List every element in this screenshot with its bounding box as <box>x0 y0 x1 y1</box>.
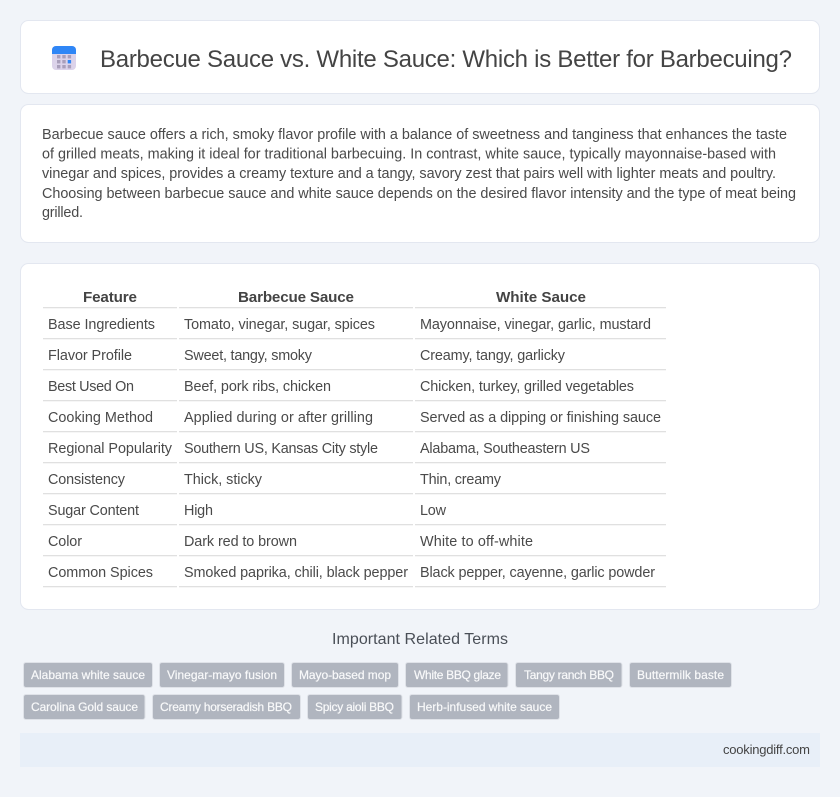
table row: consistency: Thick, sticky <box>184 472 263 488</box>
table row: consistency: Consistency <box>48 472 126 488</box>
footer source text: cookingdiff.com <box>723 742 810 757</box>
tag: Tangy ranch BBQ: Tangy ranch BBQ <box>524 668 614 682</box>
table header row: Barbecue Sauce <box>238 289 354 306</box>
table row: color <box>48 534 533 550</box>
table row: color: Dark red to brown <box>184 534 297 550</box>
tag: Herb-infused white sauce <box>410 694 560 720</box>
table row: regional popularity: Regional Popularity <box>48 441 173 457</box>
table row: regional popularity: Alabama, Southeastern US <box>420 441 590 457</box>
table row: regional popularity: Southern US, Kansas City style <box>184 441 378 457</box>
panel: introduction paragraph <box>20 104 820 242</box>
table row: cooking method <box>48 410 661 426</box>
table row: sugar content: Sugar Content <box>48 503 139 519</box>
tag: Carolina Gold sauce <box>24 694 145 720</box>
tag: White BBQ glaze <box>406 662 508 688</box>
tag: Herb-infused white sauce: Herb-infused white sauce <box>417 700 552 714</box>
tag: Buttermilk baste <box>630 662 732 688</box>
tags: related terms <box>24 662 732 720</box>
tag: Alabama white sauce <box>24 662 152 688</box>
table row: sugar content <box>48 503 447 519</box>
table header row: Feature <box>83 289 137 306</box>
tag: Spicy aioli BBQ: Spicy aioli BBQ <box>315 700 394 714</box>
table row: common spices <box>48 565 655 581</box>
text block: introduction: vinegar and spices, provides a creamy texture and a tangy, savory zest that pairs well with lighter meats and poultry. <box>42 166 776 182</box>
text block: introduction <box>42 127 796 221</box>
tag: Tangy ranch BBQ <box>516 662 622 688</box>
table row: base ingredients: Base Ingredients <box>48 317 155 333</box>
tag: Mayo-based mop <box>292 662 398 688</box>
table row: color: White to off-white <box>420 534 533 550</box>
table row: best used on: Best Used On <box>48 379 134 395</box>
text block: introduction: grilled. <box>42 205 83 221</box>
table row: common spices: Common Spices <box>48 565 153 581</box>
text block: introduction: of grilled meats, making it ideal for traditional barbecuing. In contrast, white sauce, typically mayonnaise-based with <box>42 146 776 162</box>
table header row: White Sauce <box>496 289 586 306</box>
table row: sugar content: High <box>184 503 213 519</box>
table row: cooking method: Applied during or after grilling <box>184 410 373 426</box>
tag: Alabama white sauce: Alabama white sauce <box>31 668 145 682</box>
text block: introduction: Choosing between barbecue sauce and white sauce depends on the desired flavor intensity and the type of meat being <box>42 186 796 202</box>
panel: title header <box>20 20 820 94</box>
table row: regional popularity <box>48 441 590 457</box>
table row: common spices: Smoked paprika, chili, black pepper <box>184 565 408 581</box>
panel: comparison table <box>20 264 820 610</box>
table row: best used on <box>48 379 634 395</box>
table row: base ingredients: Tomato, vinegar, sugar, spices <box>184 317 375 333</box>
tag: Creamy horseradish BBQ: Creamy horseradish BBQ <box>160 700 292 714</box>
table row: cooking method: Served as a dipping or finishing sauce <box>420 410 661 426</box>
table header row <box>83 289 586 306</box>
table row: flavor profile <box>48 348 566 364</box>
text block: introduction: Barbecue sauce offers a rich, smoky flavor profile with a balance of sweetness and tanginess that enhances the taste <box>42 127 787 143</box>
table row: flavor profile: Flavor Profile <box>48 348 132 364</box>
table row: flavor profile: Creamy, tangy, garlicky <box>420 348 566 364</box>
table row: consistency <box>48 472 502 488</box>
table row: best used on: Beef, pork ribs, chicken <box>184 379 331 395</box>
table row: base ingredients <box>48 317 651 333</box>
tag: Vinegar-mayo fusion <box>160 662 284 688</box>
icon: calendar <box>52 46 76 70</box>
tag: White BBQ glaze: White BBQ glaze <box>414 668 501 682</box>
tag: Vinegar-mayo fusion: Vinegar-mayo fusion <box>167 668 277 682</box>
footer bar <box>20 733 820 767</box>
table row: best used on: Chicken, turkey, grilled vegetables <box>420 379 634 395</box>
table row: color: Color <box>48 534 82 550</box>
table row: base ingredients: Mayonnaise, vinegar, garlic, mustard <box>420 317 651 333</box>
table row: common spices: Black pepper, cayenne, garlic powder <box>420 565 655 581</box>
heading: important related terms: Important Related Terms <box>332 631 508 648</box>
table row: cooking method: Cooking Method <box>48 410 153 426</box>
tag: Buttermilk baste: Buttermilk baste <box>637 668 724 682</box>
tag: Creamy horseradish BBQ <box>152 694 300 720</box>
table row: consistency: Thin, creamy <box>420 472 502 488</box>
tag: Spicy aioli BBQ <box>308 694 402 720</box>
tag: Mayo-based mop: Mayo-based mop <box>299 668 391 682</box>
tag: Carolina Gold sauce: Carolina Gold sauce <box>31 700 138 714</box>
table row: flavor profile: Sweet, tangy, smoky <box>184 348 313 364</box>
table row: sugar content: Low <box>420 503 447 519</box>
title: Barbecue Sauce vs. White Sauce: Which is Better for Barbecuing? <box>100 46 792 73</box>
